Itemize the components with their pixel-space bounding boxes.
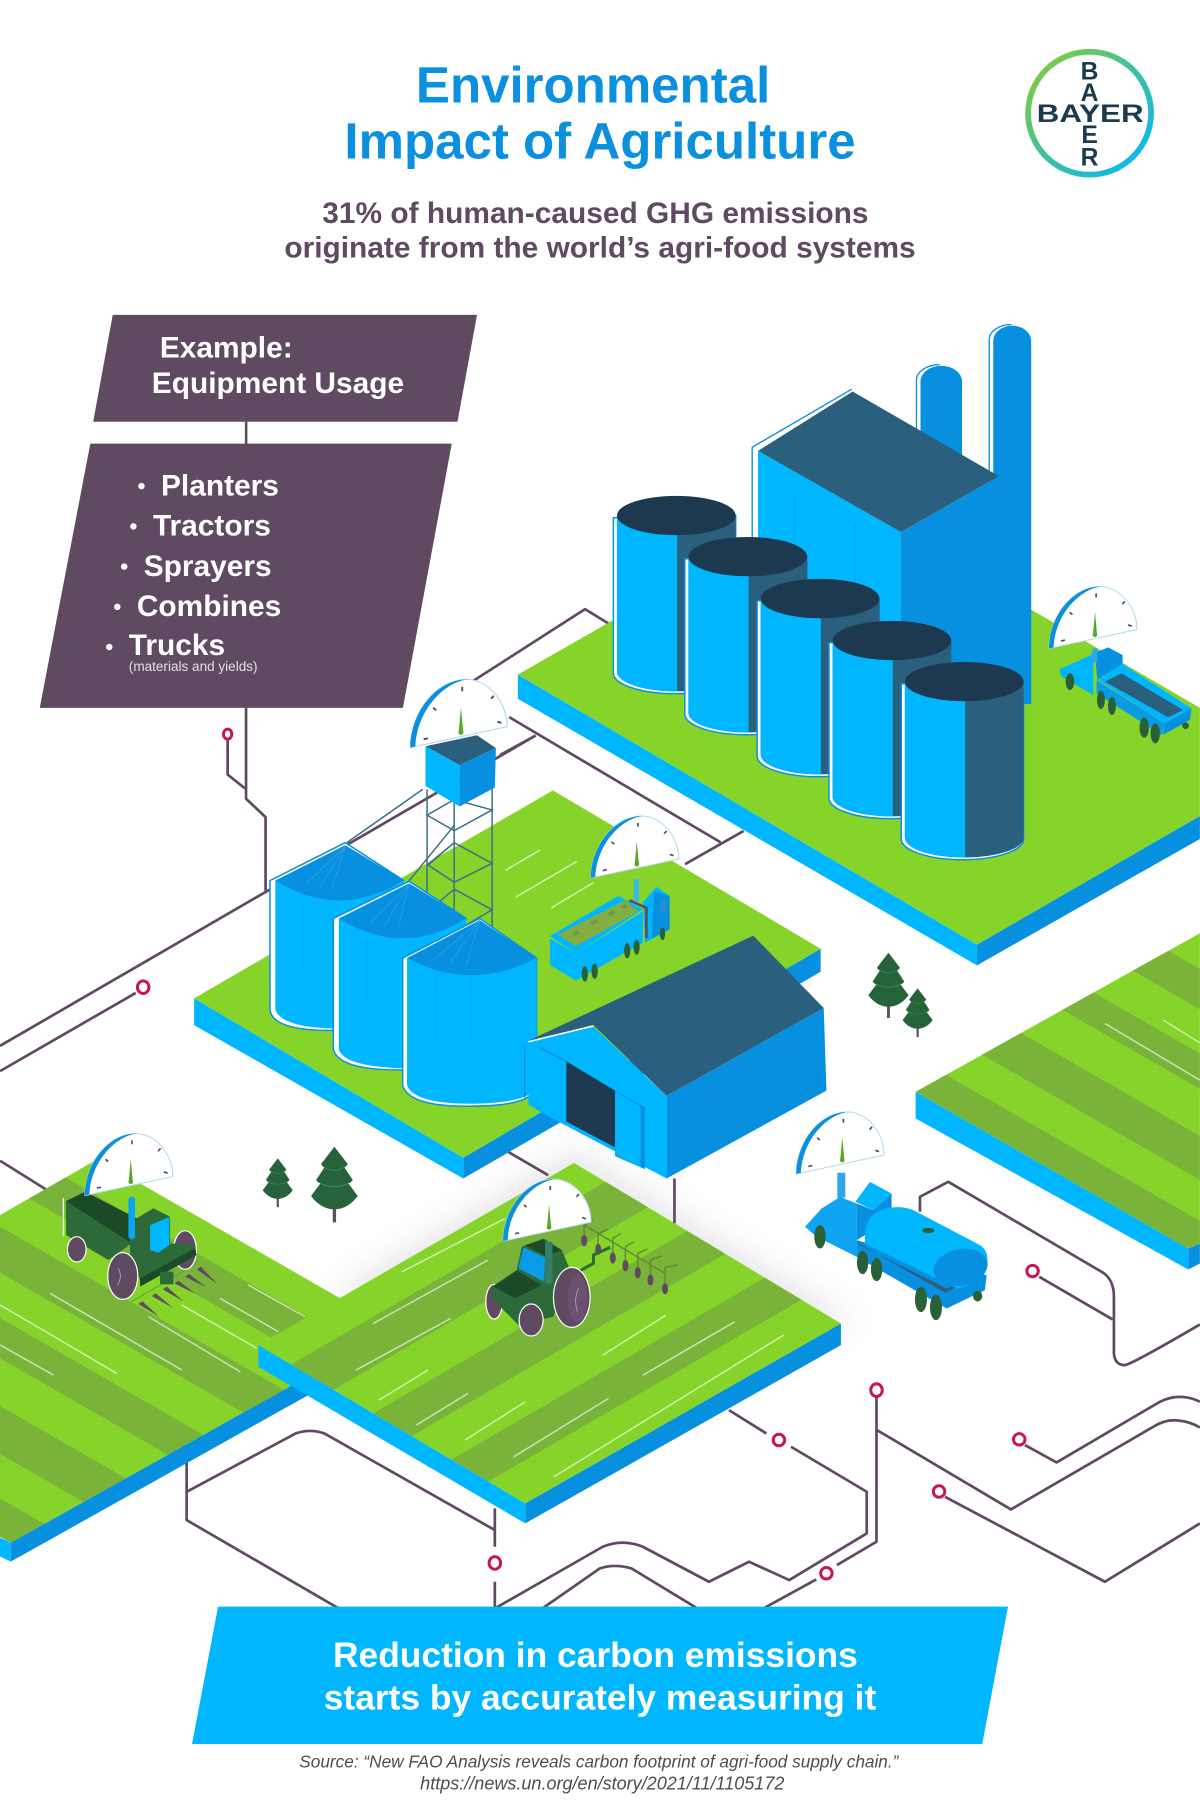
soft shadow under planter field: [333, 1149, 856, 1391]
subtitle: [284, 197, 916, 264]
subtitle: 31% of human-caused GHG emissions: [322, 197, 869, 230]
panel: example heading: [93, 315, 477, 422]
flatbed truck: [1059, 647, 1192, 743]
panel: equipment list: Trucks: [129, 629, 225, 662]
chimney: tall: [989, 325, 1031, 704]
silo 1: [270, 843, 404, 1030]
silo 2: [333, 881, 466, 1070]
field: planter striped: [258, 1162, 841, 1524]
subtitle: originate from the world’s agri-food systems: [284, 231, 916, 264]
connector between panels: [245, 422, 247, 445]
silo 3: [403, 918, 537, 1106]
banner: conclusion: Reduction in carbon emissions: [333, 1636, 858, 1675]
water tower: [347, 735, 496, 932]
title: Environmental: [416, 56, 770, 113]
panel: equipment list: Tractors: [153, 510, 271, 543]
logo: Bayer cross: B: [1081, 58, 1098, 85]
panel: equipment list: Sprayers: [144, 550, 272, 583]
silos, tower, barn: [270, 735, 826, 1178]
title: [344, 56, 856, 170]
logo: Bayer cross: BAYER: [1037, 101, 1144, 128]
gauge: water tower: [410, 679, 507, 748]
source note: [299, 1752, 900, 1793]
gauge: tanker: [796, 1112, 884, 1174]
panel: equipment list: (materials and yields): [129, 659, 258, 674]
panel: equipment list: [40, 444, 452, 708]
logo: Bayer cross: [1028, 52, 1151, 175]
logo: Bayer cross: A: [1081, 80, 1099, 107]
trees: upper pair: [868, 953, 933, 1037]
circuit traces: [0, 609, 1200, 1608]
source note: https://news.un.org/en/story/2021/11/1105172: [420, 1773, 784, 1793]
barn: [525, 936, 826, 1178]
chimney: short: [916, 365, 962, 461]
gauge: tractor: [503, 1179, 591, 1241]
gauge: grain truck: [591, 816, 679, 878]
logo: Bayer cross: R: [1081, 144, 1099, 171]
grain truck: [505, 850, 670, 982]
logo: Bayer cross: E: [1081, 122, 1098, 149]
tanker truck: [805, 1173, 991, 1320]
storage tanks: [613, 496, 1024, 860]
factory building: [752, 389, 1029, 704]
panel: equipment list: Planters: [161, 469, 279, 502]
connection dots: [137, 729, 1038, 1579]
factory platform: [518, 494, 1200, 965]
panel: example heading: Equipment Usage: [152, 367, 404, 400]
banner: conclusion: [192, 1607, 1008, 1744]
trees: lower pair: [263, 1147, 358, 1222]
factory with chimneys and tanks: [613, 325, 1031, 860]
panel: example heading: Example:: [160, 331, 293, 364]
title: Impact of Agriculture: [344, 113, 856, 170]
source note: Source: “New FAO Analysis reveals carbon footprint of agri-food supply chain.”: [299, 1752, 900, 1772]
panel: equipment list: Combines: [137, 590, 281, 623]
field: right striped: [916, 933, 1200, 1270]
gauge: combine: [85, 1133, 173, 1196]
silo platform: [194, 790, 821, 1179]
field: left striped: [0, 1161, 340, 1562]
combine harvester: [63, 1192, 217, 1317]
gauge: flatbed truck: [1049, 586, 1137, 649]
tractor with planter: [486, 1220, 677, 1336]
banner: conclusion: starts by accurately measuring it: [324, 1678, 876, 1717]
